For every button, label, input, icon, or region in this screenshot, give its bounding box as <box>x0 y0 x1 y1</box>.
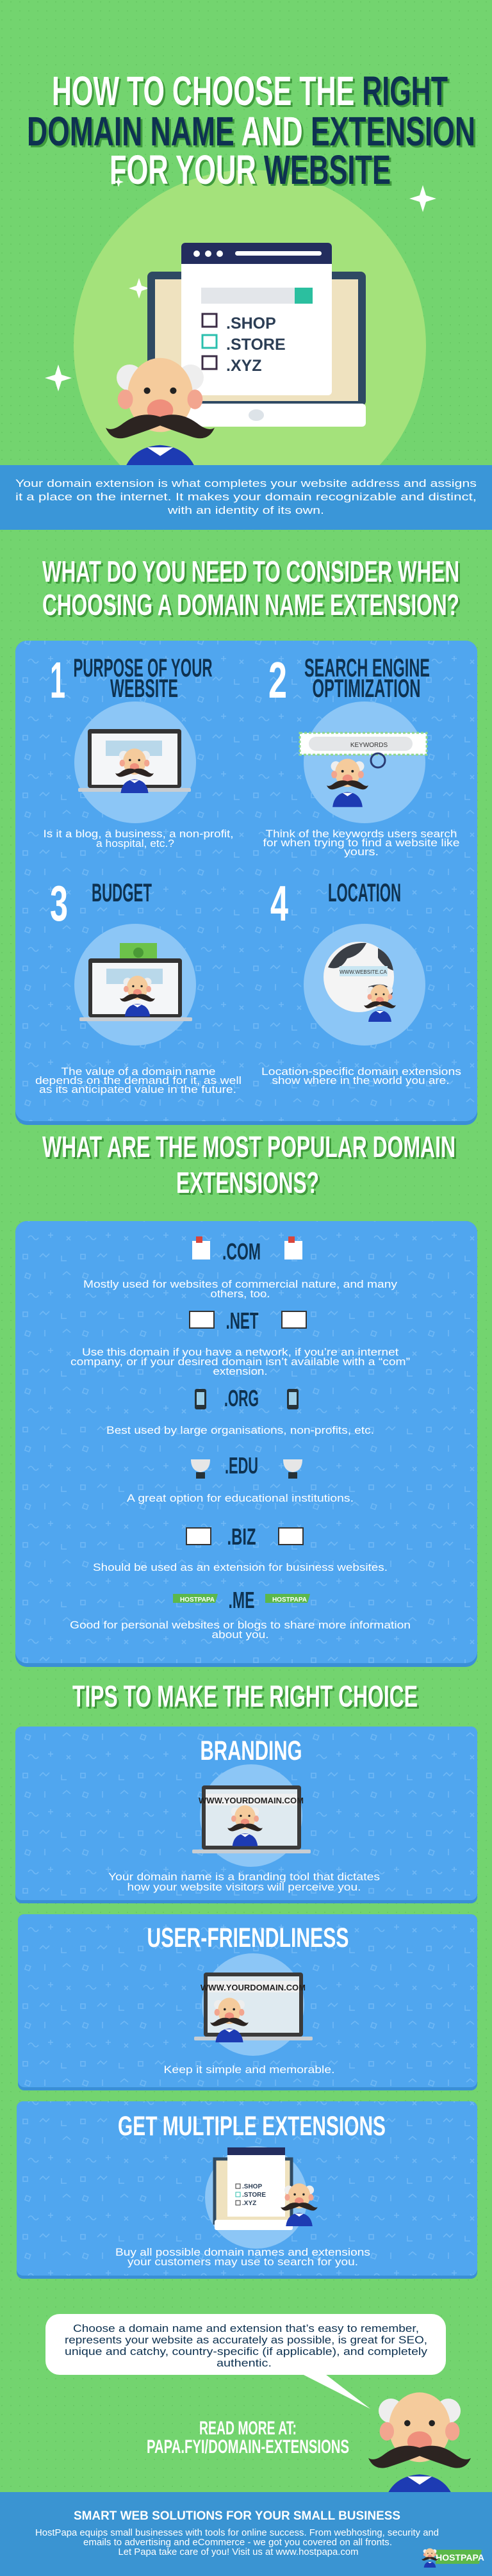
panel: popular extensions <box>15 1221 477 1667</box>
item 2: seo: 2 <box>268 652 287 709</box>
.edu: A great option for educational institutions. <box>127 1492 354 1504</box>
item 2: seo: yours. <box>344 846 379 858</box>
panel: get multiple extensions <box>17 2101 477 2279</box>
item 4: location <box>261 875 461 1087</box>
.edu: .EDU <box>225 1452 258 1479</box>
footer <box>0 2492 492 2576</box>
panel: branding: BRANDING <box>200 1735 302 1766</box>
title: HOW TO CHOOSE THE RIGHT <box>52 68 448 114</box>
title: FOR YOUR WEBSITE <box>110 147 391 193</box>
item 2: seo <box>263 652 460 858</box>
hero illustration: monitor with domain choices: .SHOP <box>226 315 276 332</box>
item 1: purpose: WEBSITE <box>110 675 178 703</box>
item 1: purpose: PURPOSE OF YOUR <box>73 654 213 682</box>
footer: Let Papa take care of you! Visit us at www.hostpapa.com <box>118 2547 359 2557</box>
.biz: Should be used as an extension for business websites. <box>93 1561 388 1573</box>
item 2: seo: Think of the keywords users search <box>265 828 457 840</box>
read more: READ MORE AT: <box>199 2418 297 2439</box>
panel: get multiple extensions: your customers may use to search for you. <box>127 2256 358 2268</box>
heading: most popular extensions: EXTENSIONS? <box>178 1168 321 1201</box>
.com: .COM <box>222 1238 261 1265</box>
item 1: purpose: Is it a blog, a business, a non-profit, <box>44 828 233 840</box>
callout: speech bubble: Choose a domain name and extension that’s easy to remember, <box>73 2322 419 2334</box>
item 3: budget: BUDGET <box>92 879 152 907</box>
heading: most popular extensions <box>42 1130 457 1201</box>
panel: user-friendliness: USER-FRIENDLINESS <box>147 1923 348 1953</box>
item 3: budget: 3 <box>50 875 68 931</box>
item 1: purpose: a hospital, etc.? <box>96 837 174 849</box>
hero illustration: monitor with domain choices: .XYZ <box>226 357 262 375</box>
.biz: .BIZ <box>227 1523 256 1550</box>
item 1: purpose: 1 <box>50 652 65 709</box>
callout: speech bubble <box>45 2314 446 2409</box>
footer: emails to advertising and eCommerce - we got you covered on all fronts. <box>83 2538 392 2548</box>
read more <box>147 2418 349 2457</box>
panel: get multiple extensions: Buy all possible domain names and extensions <box>115 2246 370 2258</box>
callout: speech bubble: represents your website as accurately as possible, is great for SEO, <box>65 2334 427 2346</box>
logo: hostpapa: HOSTPAPA <box>436 2552 484 2563</box>
.me <box>70 1587 411 1641</box>
.biz <box>93 1523 388 1573</box>
panel: get multiple extensions: .XYZ <box>242 2200 256 2207</box>
item 2: seo: OPTIMIZATION <box>313 675 420 703</box>
.net <box>70 1308 410 1377</box>
panel: get multiple extensions: .SHOP <box>242 2183 262 2190</box>
.org: .ORG <box>224 1385 259 1411</box>
panel: considerations <box>15 641 477 1125</box>
.me: Good for personal websites or blogs to share more information <box>70 1619 411 1631</box>
panel: user-friendliness: WWW.YOURDOMAIN.COM <box>201 1983 306 1992</box>
item 4: location: WWW.WEBSITE.CA <box>340 969 388 975</box>
.net: .NET <box>226 1308 259 1334</box>
.net: company, or if your desired domain isn’t available with a “com” <box>70 1356 410 1368</box>
hero circle <box>74 170 426 522</box>
.net: Use this domain if you have a network, if you’re an internet <box>82 1346 398 1358</box>
.org: Best used by large organisations, non-profits, etc. <box>106 1424 374 1436</box>
item 3: budget <box>35 875 242 1095</box>
.com <box>83 1236 398 1300</box>
logo: hostpapa <box>422 2548 484 2568</box>
item 2: seo: for when trying to find a website like <box>263 837 460 849</box>
.com: Mostly used for websites of commercial nature, and many <box>83 1278 398 1290</box>
item 3: budget: The value of a domain name <box>62 1065 215 1078</box>
item 4: location: show where in the world you are. <box>272 1074 450 1087</box>
callout: speech bubble: authentic. <box>217 2357 272 2369</box>
intro band: Your domain extension is what completes your website address and assigns <box>15 477 477 489</box>
.org <box>106 1385 374 1436</box>
sparkles <box>45 177 436 391</box>
hero illustration: monitor with domain choices <box>147 243 366 427</box>
panel: branding: how your website visitors will perceive you. <box>127 1881 361 1893</box>
callout: speech bubble: unique and catchy, country-specific (if applicable), and completely <box>65 2345 428 2358</box>
.edu <box>127 1452 354 1504</box>
.me: about you. <box>211 1628 269 1641</box>
.me: HOSTPAPA <box>180 1596 215 1604</box>
panel: get multiple extensions: GET MULTIPLE EXTENSIONS <box>118 2111 386 2142</box>
.net: extension. <box>213 1365 268 1377</box>
read more: PAPA.FYI/DOMAIN-EXTENSIONS <box>147 2436 349 2457</box>
heading: what do you need to consider <box>42 555 461 623</box>
item 2: seo: KEYWORDS <box>350 742 388 749</box>
intro band <box>0 465 492 530</box>
item 4: location: Location-specific domain extensions <box>261 1065 461 1078</box>
.me: .ME <box>228 1587 255 1613</box>
item 4: location: LOCATION <box>328 879 401 907</box>
hero illustration: monitor with domain choices: .STORE <box>226 336 286 354</box>
panel: branding: Your domain name is a branding tool that dictates <box>108 1871 380 1883</box>
character: papa thinking <box>106 358 215 484</box>
item 3: budget: depends on the demand for it, as well <box>35 1074 242 1087</box>
panel: get multiple extensions: .STORE <box>242 2192 266 2199</box>
footer: SMART WEB SOLUTIONS FOR YOUR SMALL BUSINESS <box>74 2509 400 2523</box>
item 1: purpose <box>44 652 233 849</box>
item 4: location: 4 <box>270 875 288 931</box>
intro band: with an identity of its own. <box>167 504 324 516</box>
heading: most popular extensions: EXTENSIONS? <box>176 1166 319 1199</box>
item 3: budget: as its anticipated value in the future. <box>39 1083 236 1095</box>
panel: user-friendliness: Keep it simple and memorable. <box>164 2063 334 2076</box>
character: papa pointing <box>368 2392 471 2511</box>
footer: HostPapa equips small businesses with tools for online success. From webhosting, security and <box>35 2528 439 2538</box>
panel: branding <box>15 1727 477 1903</box>
.com: others, too. <box>210 1288 270 1300</box>
title <box>27 68 477 195</box>
panel: branding: WWW.YOURDOMAIN.COM <box>199 1796 304 1805</box>
panel: user-friendliness <box>18 1914 477 2090</box>
intro band: it a place on the internet. It makes your domain recognizable and distinct, <box>15 491 477 503</box>
.me: HOSTPAPA <box>272 1596 307 1604</box>
